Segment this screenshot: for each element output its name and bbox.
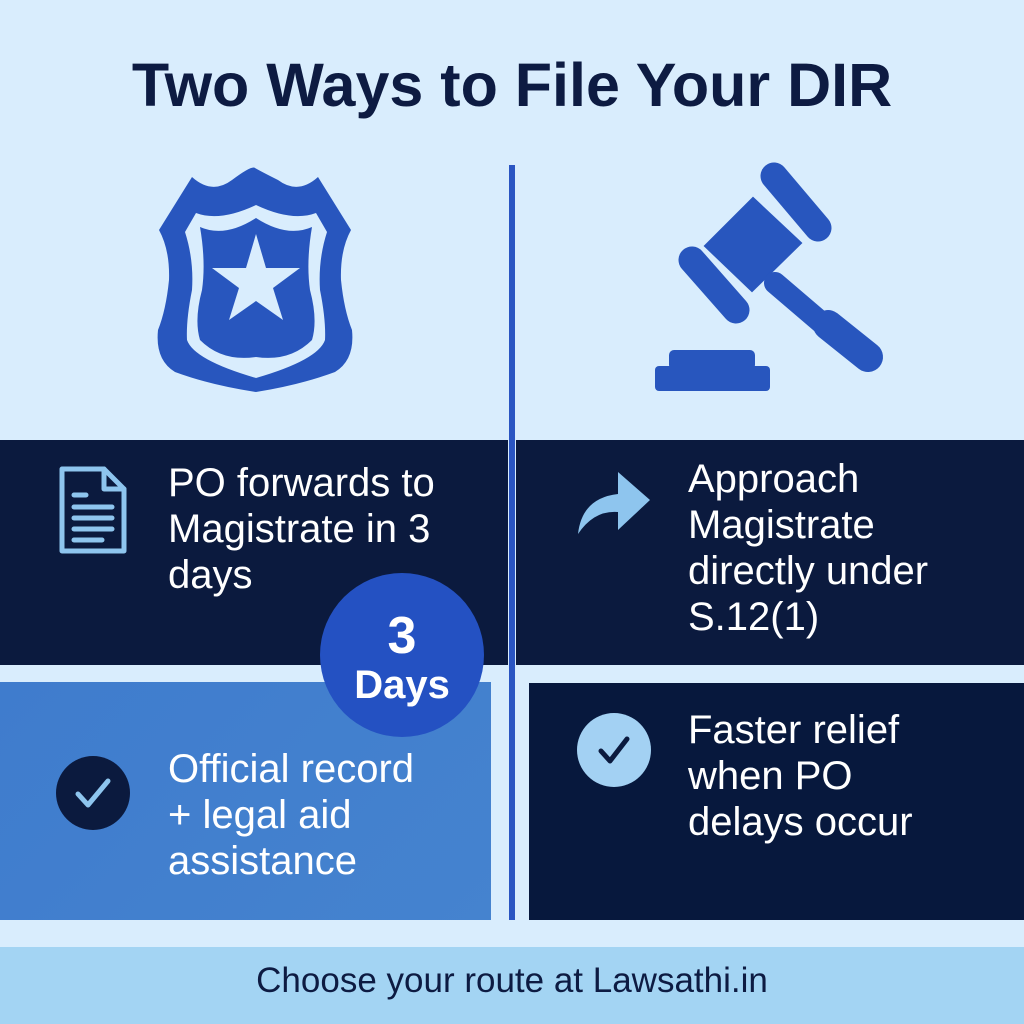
icon: police shield xyxy=(158,168,352,392)
text: PO forwards: days xyxy=(168,553,252,597)
title: Two Ways to File Your DIR xyxy=(132,51,892,119)
text: approach magistrate: S.12(1) xyxy=(688,595,819,639)
divider line xyxy=(509,165,515,920)
text: PO forwards: Magistrate in 3 xyxy=(168,507,430,551)
panel: bottom left blue xyxy=(0,682,491,920)
text: approach magistrate xyxy=(688,457,928,639)
icon: document xyxy=(60,466,126,554)
panel: top dark band right xyxy=(516,440,1024,665)
badge: 3 days: 3 xyxy=(388,607,416,665)
text: faster relief: when PO xyxy=(688,754,853,798)
panel: top dark band left xyxy=(0,440,508,665)
text: faster relief: Faster relief xyxy=(688,708,899,752)
text: official record xyxy=(168,747,414,883)
panel: bottom right dark xyxy=(529,683,1024,920)
text: official record: + legal aid xyxy=(168,793,351,837)
icon: check left xyxy=(56,756,130,830)
text: PO forwards xyxy=(168,461,435,597)
badge: 3 days: Days xyxy=(354,663,450,707)
text: faster relief xyxy=(688,708,913,844)
text: approach magistrate: Magistrate xyxy=(688,503,875,547)
footer: Choose your route at Lawsathi.in xyxy=(256,961,768,1000)
text: approach magistrate: directly under xyxy=(688,549,928,593)
text: PO forwards: PO forwards to xyxy=(168,461,435,505)
icon: check right xyxy=(577,713,651,787)
text: official record: Official record xyxy=(168,747,414,791)
text: official record: assistance xyxy=(168,839,357,883)
footer xyxy=(0,947,1024,1024)
text: approach magistrate: Approach xyxy=(688,457,859,501)
icon: gavel xyxy=(655,162,883,391)
icon: arrow xyxy=(578,472,650,534)
text: faster relief: delays occur xyxy=(688,800,913,844)
badge: 3 days xyxy=(320,573,484,737)
